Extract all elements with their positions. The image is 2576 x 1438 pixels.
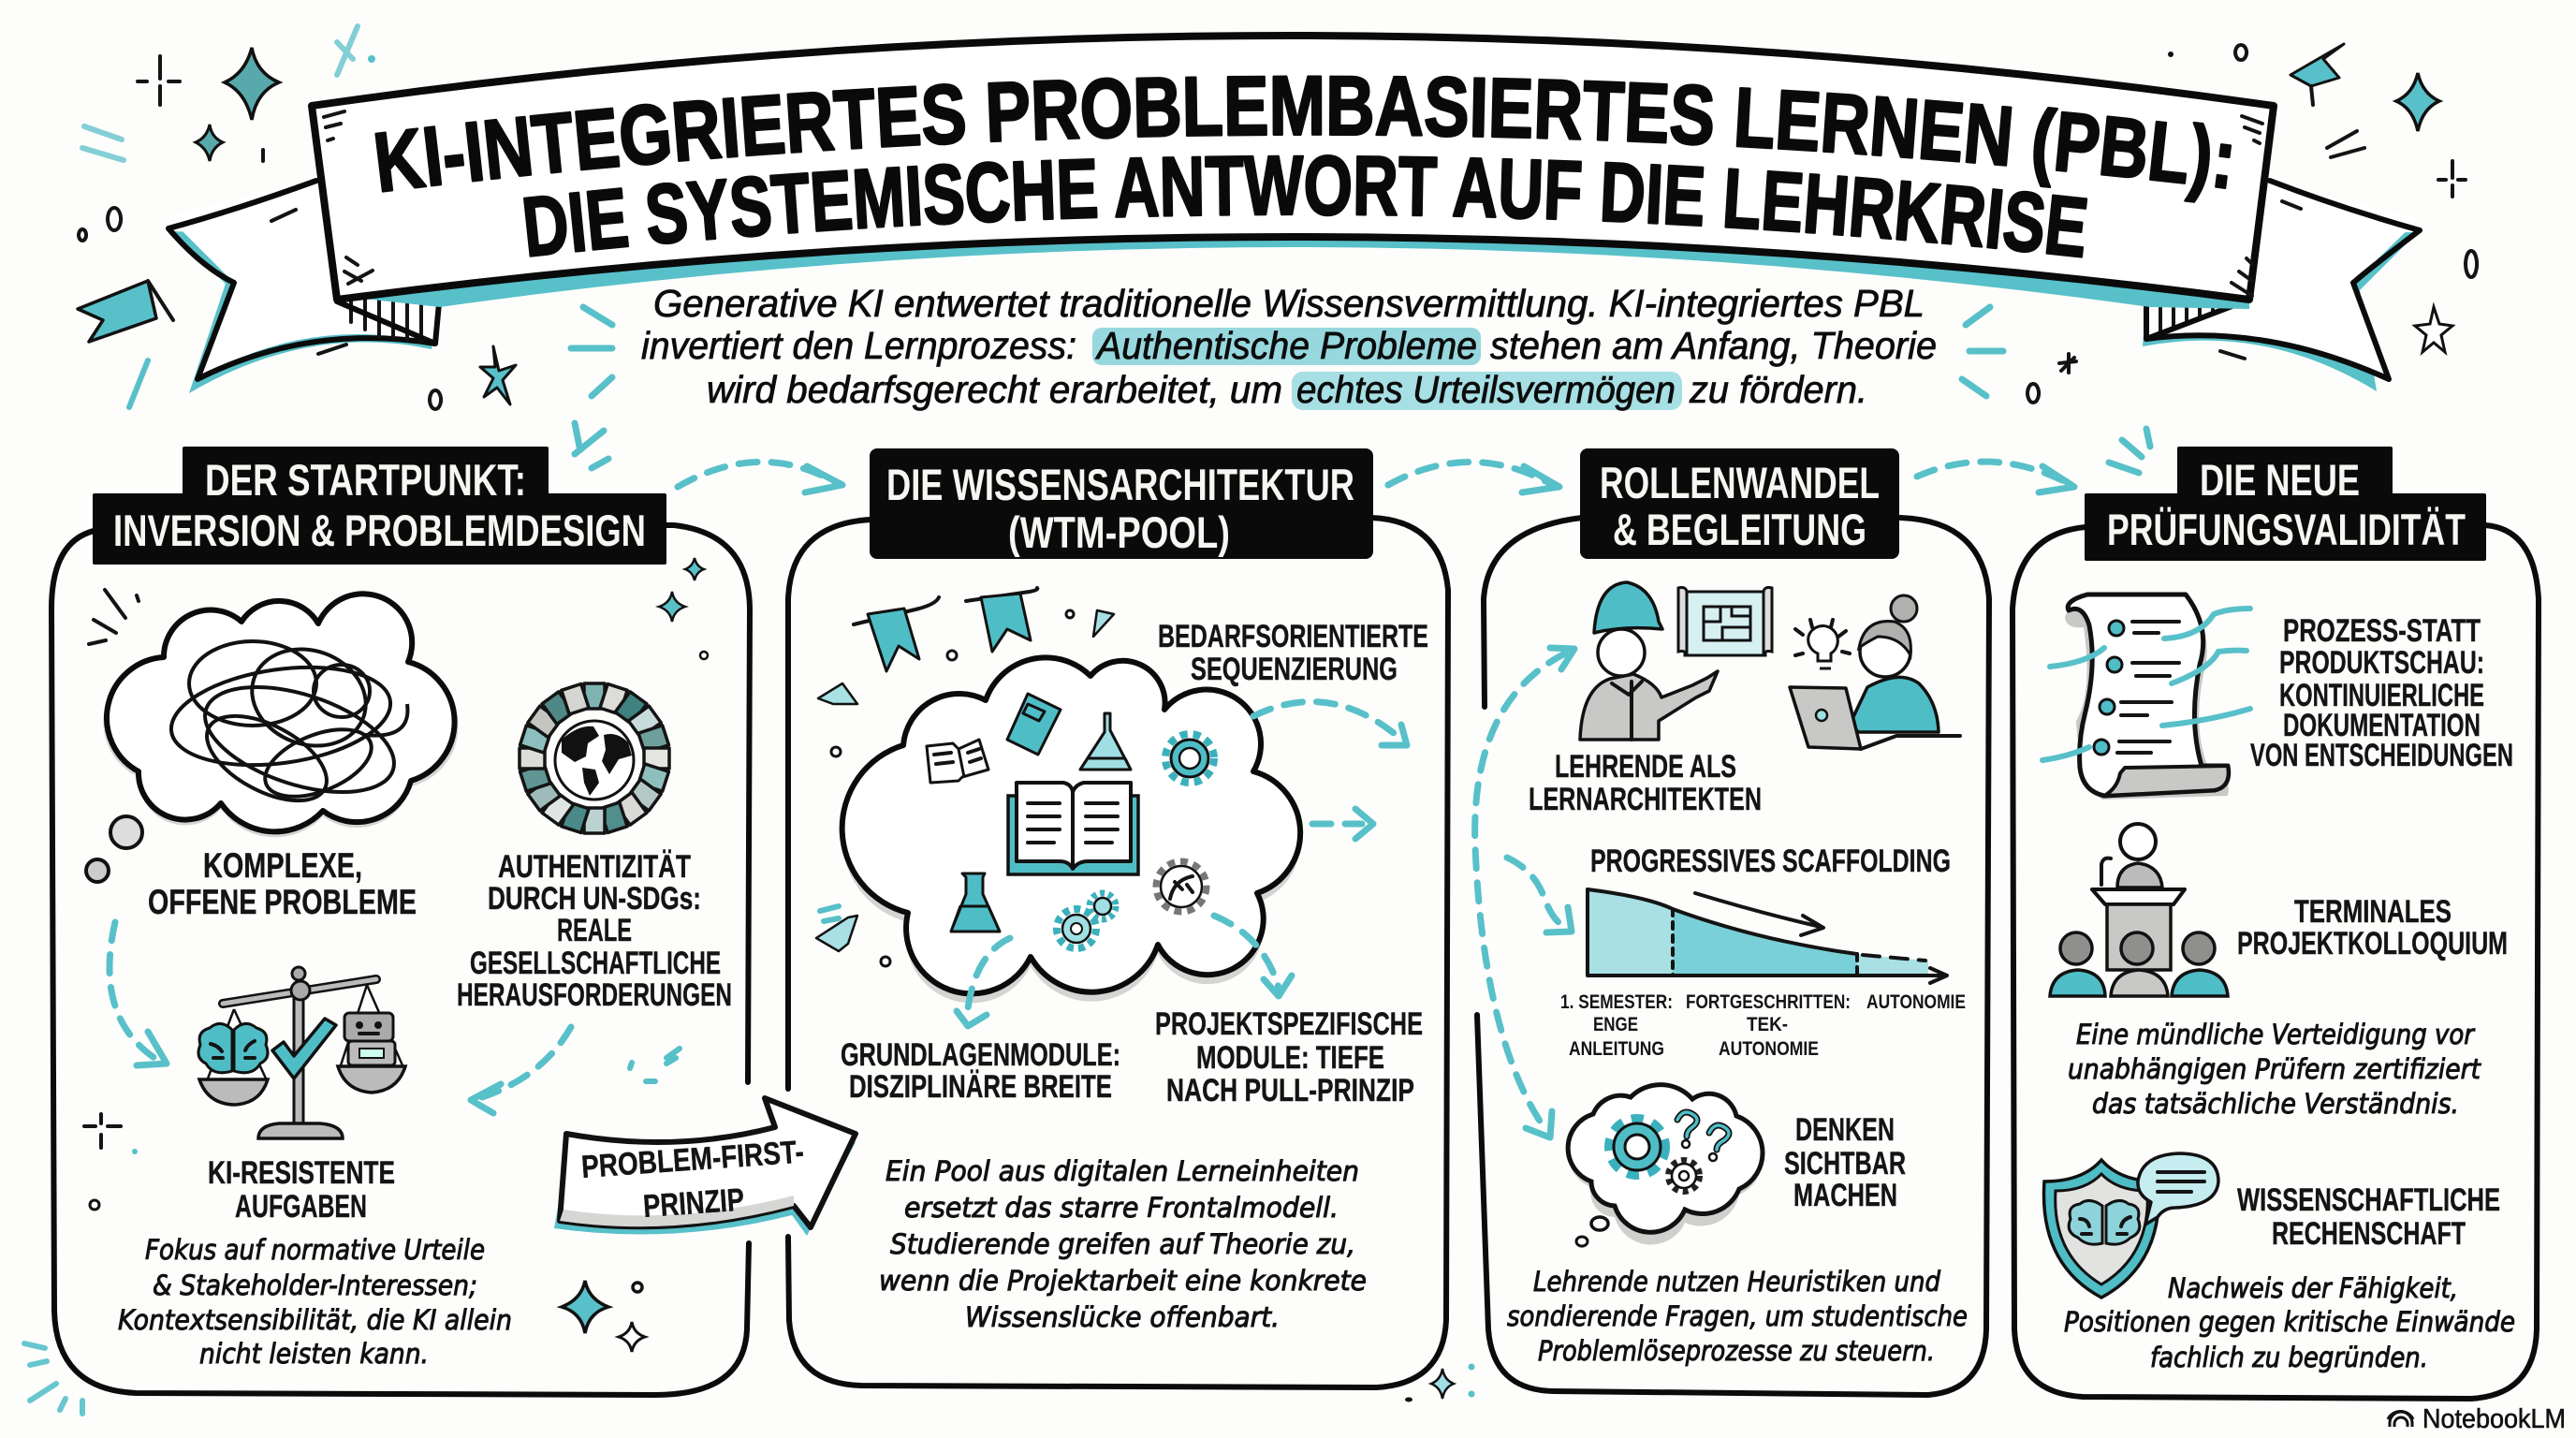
icon: gears [1057, 893, 1116, 948]
intro text [641, 282, 1937, 411]
banner subtitle text: DIE SYSTEMISCHE ANTWORT AUF DIE LEHRKRISE [523, 154, 2087, 258]
label: authentizität: REALE [557, 913, 632, 948]
icon: closed book [1007, 694, 1061, 755]
decorative sparkles top right [1962, 44, 2477, 473]
chart labels: ENGE [1593, 1014, 1638, 1035]
label: progressives scaffolding: PROGRESSIVES SCAFFOLDING [1590, 844, 1951, 879]
text: lehrende heuristiken: Problemlöseprozesse zu steuern. [1538, 1335, 1935, 1367]
arrow: sequenzierung curve [1253, 701, 1407, 745]
icon: bunting flags [816, 588, 1114, 966]
label: prozess statt produktschau: PRODUKTSCHAU: [2279, 645, 2484, 681]
text: fokus auf urteile: Kontextsensibilität, die KI allein [118, 1304, 512, 1336]
label: KI-resistente aufgaben: AUFGABEN [235, 1189, 367, 1225]
banner right tail [2143, 181, 2420, 391]
arrow: cloud right [1312, 809, 1373, 839]
logo: NotebookLM: NotebookLM [2422, 1404, 2566, 1434]
intro text: Generative KI entwertet traditionelle Wissensvermittlung. KI-integriertes PBL [653, 282, 1925, 325]
chart labels [1560, 991, 1966, 1060]
label: projektspezifische module [1155, 1006, 1423, 1108]
icon: tangled thought cloud [86, 590, 459, 882]
label: grundlagenmodule [841, 1037, 1120, 1105]
label: KI-resistente aufgaben [208, 1155, 395, 1225]
label: komplexe probleme: KOMPLEXE, [203, 846, 362, 885]
label: prozess statt produktschau: KONTINUIERLICHE [2279, 678, 2484, 713]
text: lehrende heuristiken [1507, 1266, 1968, 1367]
chart labels: AUTONOMIE [1719, 1038, 1819, 1060]
arrow: problem-first-prinzip: PROBLEM-FIRST- [580, 1134, 805, 1185]
heading: wissensarchitektur: (WTM-POOL) [1008, 507, 1230, 557]
intro text: Authentische Probleme [1094, 324, 1477, 367]
icon: student at laptop [1786, 595, 1960, 749]
arrow: panel 3 to panel 4 [1917, 462, 2074, 492]
arrow: problem-first-prinzip: PRINZIP [642, 1182, 745, 1225]
text: pool beschreibung: Wissenslücke offenbart. [965, 1301, 1280, 1333]
arrow: problem-first-prinzip [554, 1098, 856, 1236]
text: fokus auf urteile: & Stakeholder-Interessen; [153, 1269, 477, 1301]
heading: rollenwandel: & BEGLEITUNG [1613, 505, 1866, 554]
label: bedarfsorientierte sequenzierung [1158, 619, 1428, 687]
label: KI-resistente aufgaben: KI-RESISTENTE [208, 1155, 395, 1191]
decorative sparkle between panels [1405, 1363, 1475, 1402]
decorative marks bottom left [24, 1343, 82, 1414]
panel: wissensarchitektur [788, 448, 1448, 1387]
icon: shield with brain and speech bubble [2044, 1153, 2218, 1298]
highlight: echtes Urteilsvermögen [1292, 372, 1682, 410]
label: projektspezifische module: PROJEKTSPEZIFISCHE [1155, 1006, 1423, 1042]
label: wissenschaftliche rechenschaft [2237, 1182, 2500, 1252]
heading: rollenwandel: ROLLENWANDEL [1600, 458, 1880, 507]
decorative sparkles top left [78, 26, 612, 468]
banner shadow [337, 237, 2249, 309]
icon: flask top [1080, 713, 1131, 770]
arrow: long double-headed [1475, 648, 1574, 1137]
label: projektspezifische module: NACH PULL-PRINZIP [1166, 1073, 1414, 1108]
panel: rollenwandel [1475, 448, 1989, 1395]
text: fokus auf urteile: nicht leisten kann. [199, 1338, 429, 1370]
label: grundlagenmodule: DISZIPLINÄRE BREITE [849, 1069, 1112, 1105]
heading: startpunkt: DER STARTPUNKT: [205, 455, 526, 505]
title banner [166, 32, 2422, 393]
label: authentizität [457, 849, 732, 1013]
label: projektspezifische module: MODULE: TIEFE [1196, 1040, 1384, 1076]
label: komplexe probleme: OFFENE PROBLEME [148, 883, 417, 921]
text: nachweis der fähigkeit: fachlich zu begründen. [2150, 1342, 2428, 1373]
heading: rollenwandel [1580, 448, 1899, 559]
arrow: komplexe probleme to aufgaben [110, 922, 167, 1065]
chart labels: AUTONOMIE [1866, 991, 1966, 1013]
label: terminales projektkolloquium [2237, 894, 2508, 961]
label: wissenschaftliche rechenschaft: RECHENSCHAFT [2272, 1216, 2466, 1252]
arrow: to scaffolding chart [1507, 858, 1572, 932]
heading: wissensarchitektur [870, 448, 1373, 559]
intro text: echtes Urteilsvermögen [1296, 368, 1676, 411]
icon: architect with blueprint [1580, 582, 1772, 740]
text: pool beschreibung: wenn die Projektarbeit eine konkrete [879, 1265, 1367, 1297]
label: denken sichtbar machen [1784, 1112, 1906, 1213]
icon: thinking cloud [1568, 1085, 1763, 1246]
chart: scaffolding [1588, 889, 1947, 983]
text: pool beschreibung: Studierende greifen auf Theorie zu, [890, 1228, 1355, 1260]
text: pool beschreibung [879, 1155, 1367, 1333]
panel: startpunkt [51, 448, 750, 1395]
text: mündliche verteidigung: unabhängigen Prüfern zertifiziert [2068, 1053, 2481, 1085]
label: lehrende als lernarchitekten: LEHRENDE ALS [1555, 749, 1736, 785]
text: pool beschreibung: Ein Pool aus digitalen Lerneinheiten [886, 1155, 1359, 1187]
banner title text: KI-INTEGRIERTES PROBLEMBASIERTES LERNEN (PBL): [374, 75, 2232, 203]
text: nachweis der fähigkeit [2064, 1272, 2515, 1373]
label: bedarfsorientierte sequenzierung: SEQUENZIERUNG [1191, 652, 1398, 687]
label: lehrende als lernarchitekten: LERNARCHITEKTEN [1529, 782, 1762, 817]
chart labels: ANLEITUNG [1569, 1038, 1664, 1060]
icon: document scroll [2042, 594, 2250, 800]
heading: startpunkt [95, 448, 665, 563]
label: komplexe probleme [148, 846, 417, 921]
label: terminales projektkolloquium: TERMINALES [2294, 894, 2452, 930]
highlight: authentische Probleme [1092, 328, 1481, 365]
label: prozess statt produktschau [2250, 613, 2513, 773]
icon: gear heart [1165, 734, 1214, 783]
label: bedarfsorientierte sequenzierung: BEDARFSORIENTIERTE [1158, 619, 1428, 654]
arrow: authentizität to aufgaben [471, 1027, 680, 1113]
intro text: invertiert den Lernprozess: [641, 324, 1076, 367]
text: pool beschreibung: ersetzt das starre Frontalmodell. [904, 1192, 1339, 1224]
label: authentizität: DURCH UN-SDGs: [488, 881, 701, 917]
panel: prüfungsvalidität [2012, 448, 2539, 1399]
label: prozess statt produktschau: PROZESS-STATT [2283, 613, 2481, 649]
chart labels: FORTGESCHRITTEN: [1686, 991, 1851, 1013]
arrow: panel 2 to panel 3 [1388, 462, 1559, 492]
heading: prüfungsvalidität [2086, 448, 2484, 559]
icon: central open book [1008, 783, 1138, 874]
heading: prüfungsvalidität: DIE NEUE [2200, 455, 2360, 505]
chart labels: TEK- [1747, 1014, 1788, 1035]
heading: wissensarchitektur: DIE WISSENSARCHITEKTUR [886, 460, 1354, 509]
text: lehrende heuristiken: sondierende Fragen, um studentische [1507, 1300, 1968, 1332]
text: mündliche verteidigung: das tatsächliche Verständnis. [2092, 1088, 2459, 1120]
label: prozess statt produktschau: DOKUMENTATION [2283, 708, 2481, 743]
label: denken sichtbar machen: SICHTBAR [1784, 1146, 1906, 1181]
label: authentizität: GESELLSCHAFTLICHE [470, 946, 721, 981]
icon: SDG globe [520, 558, 708, 833]
banner left tail [168, 181, 440, 393]
heading: startpunkt: INVERSION & PROBLEMDESIGN [113, 506, 646, 555]
arrow: panel 1 to panel 2 [678, 462, 842, 492]
label: lehrende als lernarchitekten [1529, 749, 1762, 817]
text: fokus auf urteile [118, 1234, 512, 1370]
text: nachweis der fähigkeit: Nachweis der Fähigkeit, [2168, 1272, 2458, 1304]
icon: gear outline [1156, 861, 1207, 912]
text: lehrende heuristiken: Lehrende nutzen Heuristiken und [1533, 1266, 1941, 1298]
text: nachweis der fähigkeit: Positionen gegen kritische Einwände [2064, 1306, 2515, 1338]
label: denken sichtbar machen: DENKEN [1795, 1112, 1895, 1148]
intro text: stehen am Anfang, Theorie [1490, 324, 1937, 367]
arrow: to projektspezifische module [1214, 916, 1292, 996]
text: mündliche verteidigung: Eine mündliche Verteidigung vor [2076, 1019, 2476, 1050]
icon: balance scale [198, 967, 405, 1138]
label: denken sichtbar machen: MACHEN [1793, 1178, 1897, 1213]
label: authentizität: HERAUSFORDERUNGEN [457, 977, 732, 1013]
text: mündliche verteidigung [2068, 1019, 2481, 1120]
banner body [312, 36, 2274, 300]
icon: knowledge cloud [842, 657, 1300, 1003]
label: authentizität: AUTHENTIZITÄT [498, 849, 691, 885]
heading: prüfungsvalidität: PRÜFUNGSVALIDITÄT [2107, 505, 2466, 554]
intro text: wird bedarfsgerecht erarbeitet, um [707, 368, 1282, 411]
text: fokus auf urteile: Fokus auf normative Urteile [145, 1234, 485, 1266]
chart labels: 1. SEMESTER: [1560, 991, 1673, 1013]
label: grundlagenmodule: GRUNDLAGENMODULE: [841, 1037, 1120, 1073]
icon: small book [927, 740, 988, 783]
arrow: to grundlagenmodule [957, 938, 1010, 1026]
icon: colloquium podium [2050, 824, 2228, 996]
icon: flask bottom [951, 873, 1000, 932]
intro text: zu fördern. [1689, 368, 1867, 411]
